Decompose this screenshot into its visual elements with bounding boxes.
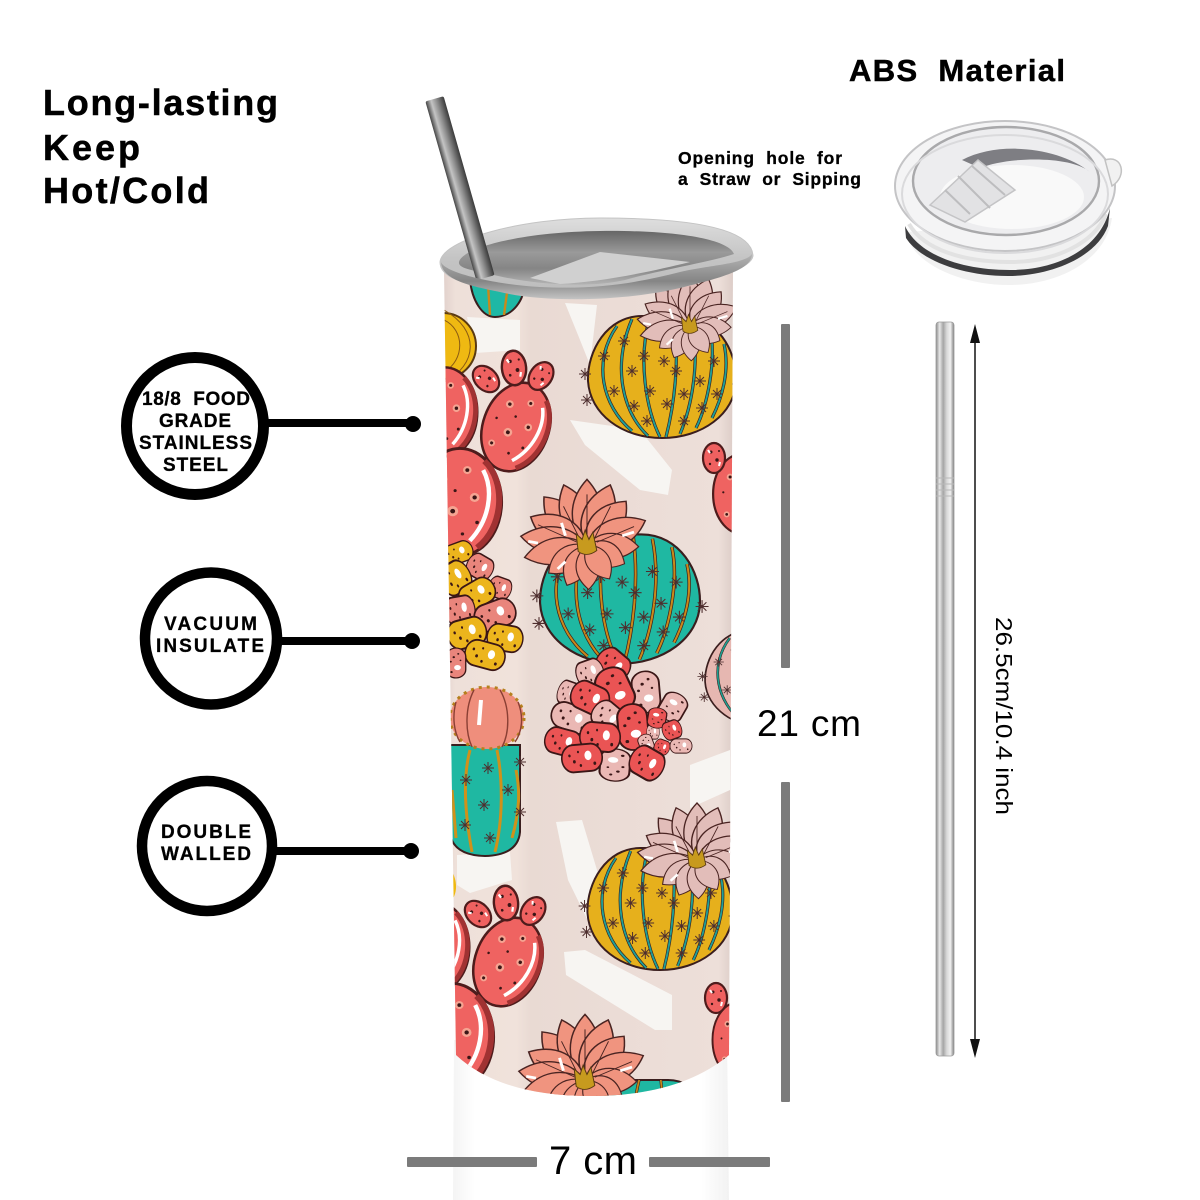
height dimension: 21 cm [757, 703, 861, 744]
tumbler base [453, 1040, 729, 1200]
callout: stainless steel: GRADE [159, 411, 231, 432]
width dimension [407, 1139, 770, 1183]
brush strokes [457, 303, 730, 1030]
teal barrel cactus [530, 534, 709, 664]
callout: double walled: DOUBLE [161, 822, 251, 843]
left succulent [448, 540, 524, 678]
red succulent [542, 643, 692, 785]
title: long-lasting keep hot/cold: Keep [43, 127, 140, 168]
pink flower top [636, 280, 733, 362]
callout: double walled: WALLED [161, 844, 251, 865]
teal barrel lower [601, 1079, 682, 1096]
salmon flower [519, 479, 651, 590]
right barrel fragment [697, 634, 732, 720]
yellow barrel cactus top [579, 316, 744, 438]
tumbler printed body [444, 272, 733, 1096]
text: opening hole note [678, 148, 861, 189]
pink and teal column cactus [450, 687, 526, 856]
title: long-lasting keep hot/cold: Hot/Cold [43, 170, 209, 211]
tumbler lid back [440, 218, 753, 298]
height dimension [757, 324, 861, 1102]
straw icon [936, 322, 954, 1056]
right pad lower [704, 982, 730, 1064]
callout: stainless steel: 18/8 FOOD [142, 389, 250, 410]
heading: abs material: ABS Material [849, 53, 1065, 88]
pink flower lower [636, 802, 730, 900]
right pad fragment [702, 442, 732, 533]
yellow barrel cactus lower [579, 848, 740, 970]
arrow: straw length [970, 324, 980, 1058]
callout: stainless steel: STEEL [163, 455, 228, 476]
callout: vacuum insulate [145, 572, 420, 704]
callout: stainless steel: STAINLESS [139, 433, 252, 454]
metal straw in tumbler [425, 96, 495, 280]
title: long-lasting keep hot/cold: Long-lasting [43, 82, 278, 123]
callout: vacuum insulate: VACUUM [164, 614, 257, 635]
top cactus fragment [470, 285, 524, 318]
text: opening hole note: Opening hole for [678, 148, 842, 168]
label: straw length: 26.5cm/10.4 inch [991, 617, 1017, 815]
lid product image [895, 121, 1121, 285]
salmon flower lower [518, 1013, 644, 1096]
yellow flower [444, 310, 477, 382]
callout: stainless steel [126, 358, 421, 494]
width dimension: 7 cm [549, 1139, 637, 1183]
callout: vacuum insulate: INSULATE [156, 636, 264, 657]
yellow flower lower [453, 874, 456, 898]
tumbler lid front rim [441, 254, 752, 299]
callout: double walled [142, 781, 419, 911]
text: opening hole note: a Straw or Sipping [678, 169, 861, 189]
title: long-lasting keep hot/cold [43, 82, 278, 211]
